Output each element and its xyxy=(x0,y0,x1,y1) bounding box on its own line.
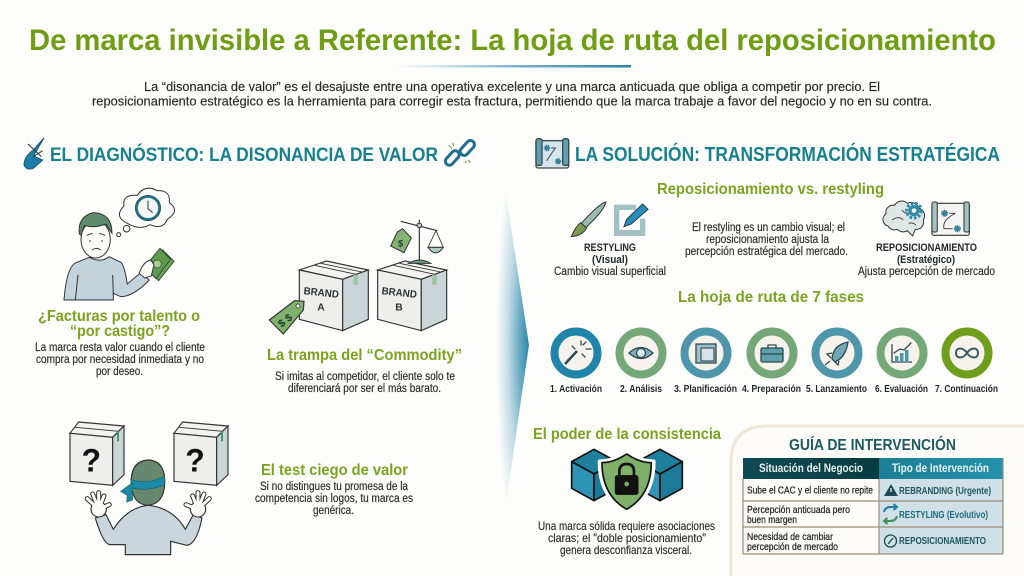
intro text: reposicionamiento estratégico es la herramienta para corregir esta fractura, permitiendo que la marca trabaje a favor del negocio y no en su contra. xyxy=(92,94,932,108)
right hand xyxy=(186,493,209,517)
mystery box right xyxy=(174,422,228,485)
phase labels xyxy=(550,384,998,395)
illustration: brand boxes, scale and tags xyxy=(269,220,447,334)
phase 4: preparation xyxy=(750,332,794,374)
illustration: worried man with money xyxy=(64,188,175,300)
intervention table: REBRANDING (Urgente) xyxy=(899,486,991,497)
head with blindfold xyxy=(131,460,165,505)
icon: strategy map xyxy=(536,139,569,168)
box A: BRAND xyxy=(303,286,340,301)
icon: map xyxy=(932,202,969,235)
label: restyling: (Visual) xyxy=(592,254,628,266)
intervention table: Necesidad de cambiar xyxy=(747,531,833,543)
box A xyxy=(299,261,368,331)
mystery box left xyxy=(70,422,124,485)
text: facturas body xyxy=(35,342,205,378)
left hand xyxy=(87,493,109,517)
panel: diagnosis xyxy=(24,138,476,555)
intervention table: Tipo de Intervención xyxy=(892,463,989,475)
label: repositioning: REPOSICIONAMIENTO xyxy=(876,242,977,254)
text: consistency body: Una marca sólida requiere asociaciones xyxy=(538,519,715,533)
label: restyling: RESTYLING xyxy=(584,242,636,254)
heading: facturas: “por castigo”? xyxy=(70,323,170,340)
intervention table xyxy=(743,458,1003,554)
phase labels: 6. Evaluación xyxy=(875,384,928,395)
heading: test ciego: El test ciego de valor xyxy=(261,462,408,479)
label: restyling xyxy=(554,242,666,278)
price tag: $ $ xyxy=(276,312,295,330)
intervention table: percepción de mercado xyxy=(747,541,838,553)
icon: warning triangle xyxy=(884,484,898,496)
icon: shield with lock and cubes xyxy=(572,449,682,511)
text: consistency body: genera desconfianza visceral. xyxy=(560,543,692,557)
text: commodity body: diferenciará por ser el más barato. xyxy=(288,383,441,395)
icon: brain and gear xyxy=(883,201,925,236)
box A: A xyxy=(317,303,325,314)
intervention table: REPOSICIONAMIENTO xyxy=(899,536,986,547)
box B: B xyxy=(395,303,403,314)
heading: commodity: La trampa del “Commodity” xyxy=(267,347,462,364)
intro text xyxy=(92,79,932,108)
icon: paintbrush xyxy=(571,202,606,237)
phase labels: 1. Activación xyxy=(550,384,602,395)
text: comparison explanation: percepción estratégica del mercado. xyxy=(685,246,848,258)
body xyxy=(95,505,202,555)
intervention table: Situación del Negocio xyxy=(759,463,863,475)
intervention table: Percepción anticuada pero xyxy=(747,504,850,516)
intervention table: Sube el CAC y el cliente no repite xyxy=(747,484,873,496)
text: test ciego body: genérica. xyxy=(313,505,354,517)
text: comparison explanation xyxy=(685,222,848,258)
phase labels: 5. Lanzamiento xyxy=(806,384,867,395)
diagnosis heading: EL DIAGNÓSTICO: LA DISONANCIA DE VALOR xyxy=(50,142,438,166)
phase labels: 3. Planificación xyxy=(674,384,737,395)
label: repositioning xyxy=(858,242,995,278)
text: test ciego body: Si no distingues tu promesa de la xyxy=(260,481,409,493)
mystery box right: ? xyxy=(185,442,205,478)
text: commodity body: Si imitas al competidor, el cliente solo te xyxy=(275,371,455,383)
heading: seven phase roadmap: La hoja de ruta de 7 fases xyxy=(678,289,864,306)
phase labels: 4. Preparación xyxy=(742,384,801,395)
shirt xyxy=(64,257,149,300)
title underline xyxy=(395,65,631,68)
hand xyxy=(139,260,154,278)
text: facturas body: compra por necesidad inmediata y no xyxy=(36,354,204,366)
phase 7: continuation xyxy=(946,332,988,374)
small tag: $ xyxy=(398,239,404,249)
text: facturas body: por deseo. xyxy=(96,366,143,378)
text: comparison explanation: El restyling es un cambio visual; el xyxy=(692,222,845,234)
intervention table: buen margen xyxy=(747,514,797,526)
phase labels: 2. Análisis xyxy=(620,384,662,395)
text: facturas body: La marca resta valor cuando el cliente xyxy=(35,342,205,354)
label: restyling: Cambio visual superficial xyxy=(554,266,666,278)
intervention table: RESTYLING (Evolutivo) xyxy=(899,510,988,521)
icon: refresh arrows xyxy=(884,504,897,524)
mystery box left: ? xyxy=(82,442,101,478)
title: De marca invisible a Referente: La hoja de ruta del reposicionamiento xyxy=(29,24,996,57)
price tag xyxy=(269,301,304,334)
text: commodity body xyxy=(275,371,455,395)
panel: solution xyxy=(533,139,1024,576)
heading: consistency: El poder de la consistencia xyxy=(533,426,721,443)
label: repositioning: Ajusta percepción de mercado xyxy=(858,266,995,278)
phase 2: analysis xyxy=(620,332,662,374)
icon: compass check xyxy=(884,535,896,547)
icon: edit square xyxy=(614,204,648,236)
phase 3: planning xyxy=(684,332,728,374)
small tag xyxy=(391,229,411,253)
text: consistency body: claras; el "doble posicionamiento" xyxy=(548,531,706,545)
intro text: La “disonancia de valor” es el desajuste entre una operativa excelente y una marca anticuada que obliga a competir por precio. El xyxy=(144,79,880,94)
box B: BRAND xyxy=(381,286,418,301)
text: comparison explanation: reposicionamiento ajusta la xyxy=(706,234,830,246)
text: consistency body xyxy=(538,519,715,557)
icon: broken chain xyxy=(444,139,476,167)
text: test ciego body: competencia sin logos, tu marca es xyxy=(255,493,413,505)
scale xyxy=(401,220,443,263)
roadmap phases xyxy=(550,332,998,395)
heading: facturas xyxy=(38,308,200,340)
head xyxy=(81,221,110,258)
icon: broken tool xyxy=(24,138,44,169)
heading: repositioning vs restyling: Reposicionamiento vs. restyling xyxy=(657,181,884,198)
guide heading: GUÍA DE INTERVENCIÓN xyxy=(789,435,956,454)
label: repositioning: (Estratégico) xyxy=(897,254,955,266)
phase labels: 7. Continuación xyxy=(935,384,998,395)
chevron arrow divider xyxy=(496,130,529,572)
phase 6: evaluation xyxy=(880,332,924,374)
heading: facturas: ¿Facturas por talento o xyxy=(38,308,200,325)
phase 5: launch xyxy=(816,332,858,374)
thought cloud with clock xyxy=(117,188,175,237)
text: test ciego body xyxy=(255,481,413,517)
phase 1: activation xyxy=(554,332,598,374)
illustration: blindfolded person and mystery boxes xyxy=(70,422,228,555)
box B xyxy=(378,261,447,331)
money xyxy=(144,248,174,281)
panel: intervention guide card xyxy=(731,426,1024,576)
